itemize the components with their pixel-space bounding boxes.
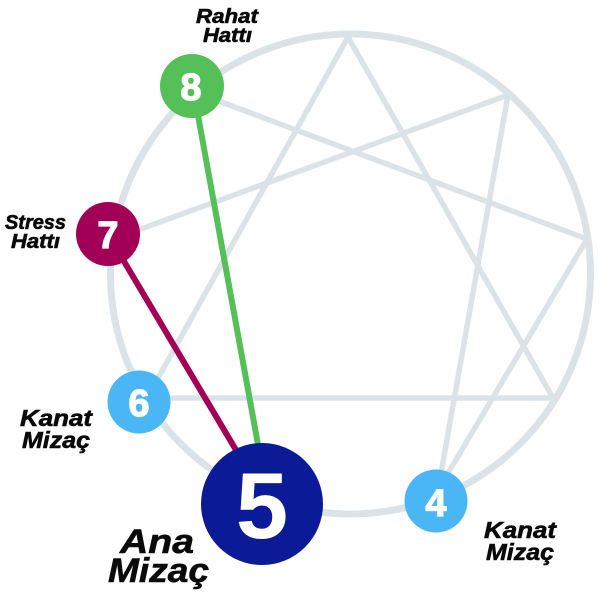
node 5: 5 (236, 453, 288, 558)
label: Kanat Mizaç right: Mizaç (486, 539, 554, 565)
label: Rahat Hattı: Hattı (203, 25, 252, 47)
label: Ana Mizaç: Mizaç (108, 552, 209, 590)
green line: comfort line from 8 to 5 (197, 110, 259, 450)
label: Ana Mizaç (108, 523, 209, 590)
label: Kanat Mizaç left: Kanat (20, 405, 94, 431)
label: Stress Hattı (5, 212, 66, 253)
node 8 (160, 54, 224, 118)
node 6: 6 (128, 383, 150, 425)
magenta line: stress line from 7 to 5 (122, 258, 236, 450)
enneagram ring (110, 34, 590, 514)
label: Kanat Mizaç right (484, 517, 558, 565)
node 4: 4 (425, 483, 447, 525)
label: Rahat Hattı: Rahat (196, 6, 259, 28)
label: Stress Hattı: Stress (5, 212, 66, 234)
node 8: 8 (180, 67, 202, 109)
label: Kanat Mizaç left (20, 405, 94, 453)
node 7 (76, 202, 140, 266)
label: Kanat Mizaç right: Kanat (484, 517, 558, 543)
enneagram inner lines (108, 37, 587, 490)
node 6 (108, 370, 170, 434)
node 4 (404, 470, 468, 532)
label: Ana Mizaç: Ana (119, 523, 194, 561)
node 5 (201, 443, 323, 565)
node 7: 7 (97, 215, 119, 257)
label: Rahat Hattı (196, 6, 259, 47)
label: Kanat Mizaç left: Mizaç (22, 427, 90, 453)
label: Stress Hattı: Hattı (11, 231, 60, 253)
